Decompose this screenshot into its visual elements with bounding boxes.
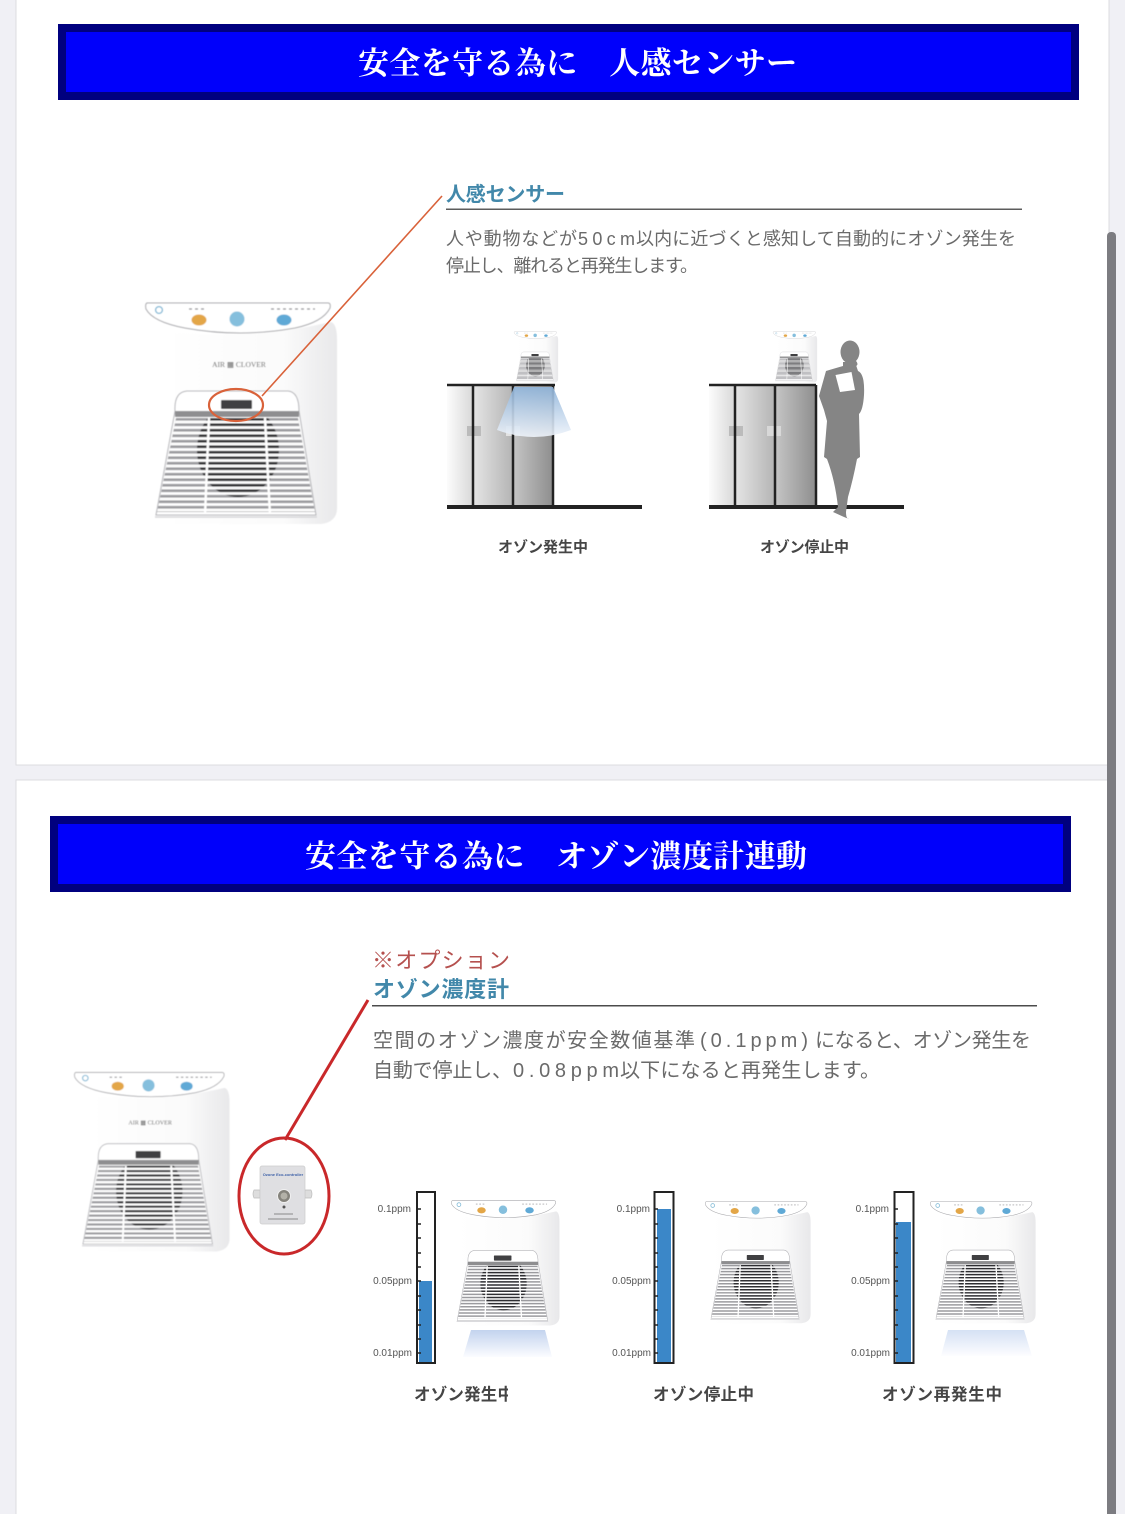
purifier on wall bbox=[514, 332, 558, 383]
gauge scene: stopped bbox=[612, 1192, 811, 1404]
caption: オゾン停止中 bbox=[760, 538, 849, 556]
heading banner: human sensor bbox=[62, 28, 1075, 96]
description text: 自動で停止し、 bbox=[373, 1059, 512, 1082]
description text: 50cm bbox=[578, 229, 635, 249]
description text: 停止し、離れると再発生します。 bbox=[446, 256, 698, 276]
heading banner: ozone meter: 安全を守る為に オゾン濃度計連動 bbox=[305, 839, 807, 874]
option note: ※オプション bbox=[372, 948, 510, 973]
purifier bbox=[705, 1202, 811, 1323]
callout: sensor location bbox=[209, 196, 442, 421]
purifier on wall bbox=[773, 332, 817, 383]
level gauge: 0.05ppm bbox=[373, 1276, 412, 1287]
level gauge: 0.1ppm bbox=[378, 1204, 411, 1215]
description text: 以内に近づくと感知して自動的にオゾン発生を bbox=[636, 229, 1016, 249]
level gauge bbox=[851, 1192, 914, 1363]
description text: (0.1ppm) bbox=[700, 1030, 808, 1052]
scene: ozone generating bbox=[447, 332, 642, 556]
level gauge bbox=[612, 1192, 674, 1363]
description text: 空間のオゾン濃度が安全数値基準 bbox=[373, 1029, 695, 1052]
paper held by person bbox=[836, 372, 855, 392]
person silhouette bbox=[819, 340, 864, 519]
purifier bbox=[930, 1202, 1036, 1323]
level gauge: 0.01ppm bbox=[612, 1348, 651, 1359]
description text bbox=[373, 1029, 1031, 1082]
level gauge: 0.01ppm bbox=[373, 1348, 412, 1359]
panel: human sensor bbox=[16, 0, 1109, 765]
cabinet bbox=[447, 385, 642, 509]
icon: air purifier bbox=[74, 1072, 230, 1251]
caption: オゾン再発生中 bbox=[882, 1385, 1002, 1404]
heading banner: ozone meter bbox=[54, 820, 1067, 888]
ozone flow bbox=[463, 1330, 552, 1357]
panel: ozone meter link bbox=[16, 780, 1109, 1514]
caption: オゾン発生中 bbox=[498, 538, 588, 556]
heading banner: human sensor: 安全を守る為に 人感センサー bbox=[358, 46, 797, 81]
caption, cut off: オゾン発生中 bbox=[414, 1385, 514, 1404]
cabinet bbox=[709, 385, 904, 509]
gauge scene: generating bbox=[373, 1192, 559, 1404]
purifier bbox=[451, 1201, 559, 1326]
level gauge: 0.1ppm bbox=[856, 1204, 889, 1215]
description text: 人や動物などが bbox=[446, 229, 577, 249]
subheading: human sensor: 人感センサー bbox=[446, 182, 565, 206]
level gauge: 0.05ppm bbox=[851, 1276, 890, 1287]
gauge scene: regenerating bbox=[851, 1192, 1036, 1404]
icon: air purifier: AIR ▦ CLOVER bbox=[128, 1120, 173, 1126]
heading rule bbox=[446, 208, 1022, 210]
description text bbox=[446, 229, 1016, 276]
ozone flow bbox=[941, 1330, 1032, 1356]
level gauge: 0.01ppm bbox=[851, 1348, 890, 1359]
icon: ozone sensor module bbox=[253, 1166, 312, 1224]
subheading: ozone meter: オゾン濃度計 bbox=[373, 977, 509, 1002]
scrollbar bbox=[1107, 232, 1116, 1514]
caption: オゾン停止中 bbox=[653, 1385, 754, 1404]
icon: air purifier with sensor: AIR ▦ CLOVER bbox=[212, 360, 266, 369]
scene: ozone stopped bbox=[709, 332, 904, 556]
description text: 以下になると再発生します。 bbox=[620, 1059, 880, 1082]
level gauge: 0.05ppm bbox=[612, 1276, 651, 1287]
level gauge bbox=[373, 1192, 435, 1363]
icon: ozone sensor module: Ozone Eco-controller bbox=[263, 1172, 304, 1177]
description text: 0.08ppm bbox=[513, 1060, 619, 1082]
callout: ozone sensor bbox=[239, 1000, 368, 1254]
description text: になると、オゾン発生を bbox=[815, 1029, 1031, 1052]
heading rule bbox=[372, 1005, 1037, 1006]
level gauge: 0.1ppm bbox=[617, 1204, 650, 1215]
sensor beam bbox=[497, 387, 571, 437]
icon: air purifier with sensor bbox=[145, 303, 337, 524]
